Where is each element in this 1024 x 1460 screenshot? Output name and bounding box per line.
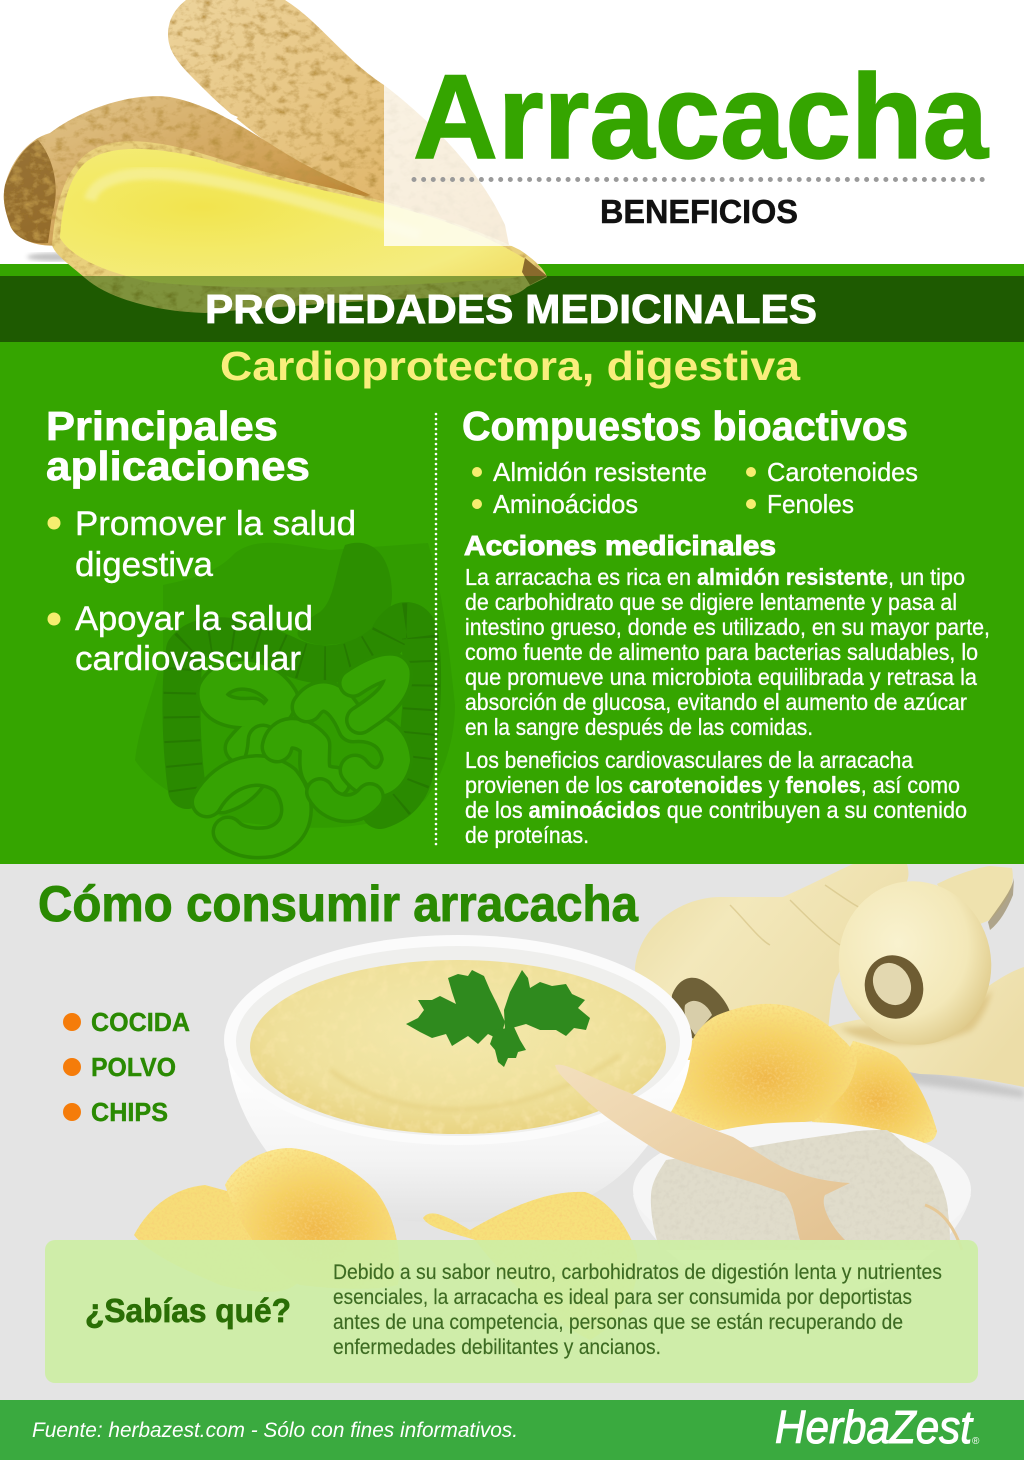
parsley	[406, 970, 590, 1067]
paragraph 2	[465, 747, 967, 848]
bullet 1	[48, 516, 60, 530]
heading: Acciones medicinales	[464, 530, 776, 561]
callout text: esenciales, la arracacha es ideal para ser consumida por deportistas	[333, 1285, 912, 1309]
illustration: powder bowl	[633, 1122, 971, 1300]
paragraph 2: provienen de los carotenoides y fenoles, así como	[465, 772, 960, 798]
soft shadow	[880, 1060, 1024, 1098]
illustration: bowl of puree	[224, 935, 692, 1223]
shadow beside tail	[988, 878, 1014, 930]
paragraph 1: que promueve una microbiota equilibrada y retrasa la	[465, 664, 977, 690]
compounds list: Carotenoides	[767, 457, 918, 487]
chip left back	[134, 1185, 300, 1292]
ridges	[730, 885, 875, 945]
footer bar	[0, 1400, 1024, 1460]
paragraph 2: Los beneficios cardiovasculares de la arracacha	[465, 747, 913, 773]
heading: propiedades medicinales: PROPIEDADES MEDICINALES	[205, 286, 817, 332]
paragraph 1	[465, 564, 990, 740]
source note: Fuente: herbazest.com - Sólo con fines informativos.	[32, 1419, 518, 1442]
illustration: digestive system watermark	[135, 543, 455, 843]
compounds list: Almidón resistente	[493, 457, 707, 487]
title: Arracacha	[413, 50, 989, 184]
paragraph 2: de los aminoácidos que contribuyen a su contenido	[465, 797, 967, 823]
root 3	[828, 967, 1024, 1087]
cut root, pale ring	[90, 174, 420, 235]
list item 1: Promover la salud	[75, 505, 356, 543]
chip center	[423, 1192, 637, 1340]
page background: white header	[0, 0, 1024, 264]
list item 2	[75, 600, 313, 678]
list item 1: digestiva	[75, 546, 213, 584]
spoon handle	[555, 1065, 850, 1240]
cut root, yellow flesh	[60, 149, 531, 288]
root tip	[522, 258, 547, 285]
bowl body	[228, 1060, 690, 1223]
shadow cast on root 3	[840, 990, 992, 1045]
list item 2: cardiovascular	[75, 640, 301, 678]
vertical dotted divider	[435, 414, 437, 846]
root 2 tail	[937, 866, 1013, 930]
powder bowl rim	[633, 1122, 971, 1258]
spoon rim	[925, 1205, 962, 1250]
subtitle: BENEFICIOS	[600, 193, 798, 230]
green section background	[0, 264, 1024, 864]
heading	[46, 403, 310, 489]
panel: sabias que	[45, 1240, 978, 1383]
paragraph 1: La arracacha es rica en almidón resistente, un tipo	[465, 564, 965, 590]
orange bullets	[63, 1013, 81, 1121]
upper root	[168, 0, 510, 250]
gap between roots	[198, 100, 238, 120]
paragraph 1: en la sangre después de las comidas.	[465, 714, 813, 740]
illustration: arracacha roots in header	[4, 0, 547, 313]
powder	[651, 1130, 950, 1250]
heading: Compuestos bioactivos	[462, 403, 908, 449]
crown	[857, 948, 931, 1026]
translucent white panel behind title	[384, 75, 1024, 246]
dotted divider	[414, 177, 986, 182]
heading: Principales	[46, 403, 278, 449]
list: ways to consume	[63, 1007, 190, 1127]
labels	[91, 1007, 190, 1127]
bullets	[472, 467, 756, 509]
labels: POLVO	[91, 1052, 176, 1082]
dark heading band	[0, 276, 1024, 342]
callout text	[333, 1260, 942, 1359]
paragraph 1: intestino grueso, donde es utilizado, en su mayor parte,	[465, 614, 990, 640]
paragraph 2: de proteínas.	[465, 822, 589, 848]
bullet 2	[48, 612, 60, 626]
root 1	[635, 864, 908, 1040]
grey section background	[0, 864, 1024, 1400]
labels: COCIDA	[91, 1007, 190, 1037]
bowl inside	[236, 946, 680, 1136]
darkened root inside band	[0, 276, 1024, 342]
compounds list	[493, 457, 918, 519]
callout box	[45, 1240, 978, 1383]
heading: como consumir: Cómo consumir arracacha	[38, 876, 639, 932]
logo: ®	[972, 1436, 980, 1447]
compounds list: Aminoácidos	[493, 489, 638, 519]
chip front	[667, 1004, 857, 1131]
cut root, pale rim	[52, 141, 547, 313]
illustration: chips right	[667, 1004, 937, 1143]
illustration: wooden spoon	[555, 1065, 962, 1250]
illustration: chips left	[134, 1148, 637, 1340]
paragraph 1: de carbohidrato que se digiere lentamente y pasa al	[465, 589, 957, 615]
chip back	[812, 1041, 937, 1143]
callout heading: ¿Sabías qué?	[85, 1292, 291, 1329]
panel: compuestos bioactivos	[462, 403, 918, 519]
illustration: whole arracacha roots	[635, 864, 1024, 1098]
paragraph 1: absorción de glucosa, evitando el aumento de azúcar	[465, 689, 967, 715]
back left root	[4, 96, 370, 260]
heading: aplicaciones	[46, 443, 310, 489]
chip left front	[225, 1148, 399, 1289]
powder bowl body	[633, 1195, 971, 1300]
callout text: Debido a su sabor neutro, carbohidratos de digestión lenta y nutrientes	[333, 1260, 942, 1284]
sub heading: properties: Cardioprotectora, digestiva	[220, 343, 801, 389]
panel: principales aplicaciones	[46, 403, 356, 678]
panel: acciones medicinales	[464, 530, 990, 848]
puree swirl	[330, 1055, 620, 1110]
crown hollow	[672, 978, 730, 1040]
logo: HerbaZest	[775, 1401, 974, 1453]
bowl rim	[224, 935, 692, 1145]
shadow under root	[27, 253, 83, 261]
compounds list: Fenoles	[767, 489, 854, 519]
labels: CHIPS	[91, 1097, 168, 1127]
callout text: enfermedades debilitantes y ancianos.	[333, 1335, 661, 1359]
list item 2: Apoyar la salud	[75, 600, 313, 638]
callout text: antes de una competencia, personas que se están recuperando de	[333, 1310, 903, 1334]
paragraph 1: como fuente de alimento para bacterias saludables, lo	[465, 639, 978, 665]
list item 1	[75, 505, 356, 584]
root 2 head	[824, 867, 1006, 1059]
puree	[250, 960, 666, 1134]
